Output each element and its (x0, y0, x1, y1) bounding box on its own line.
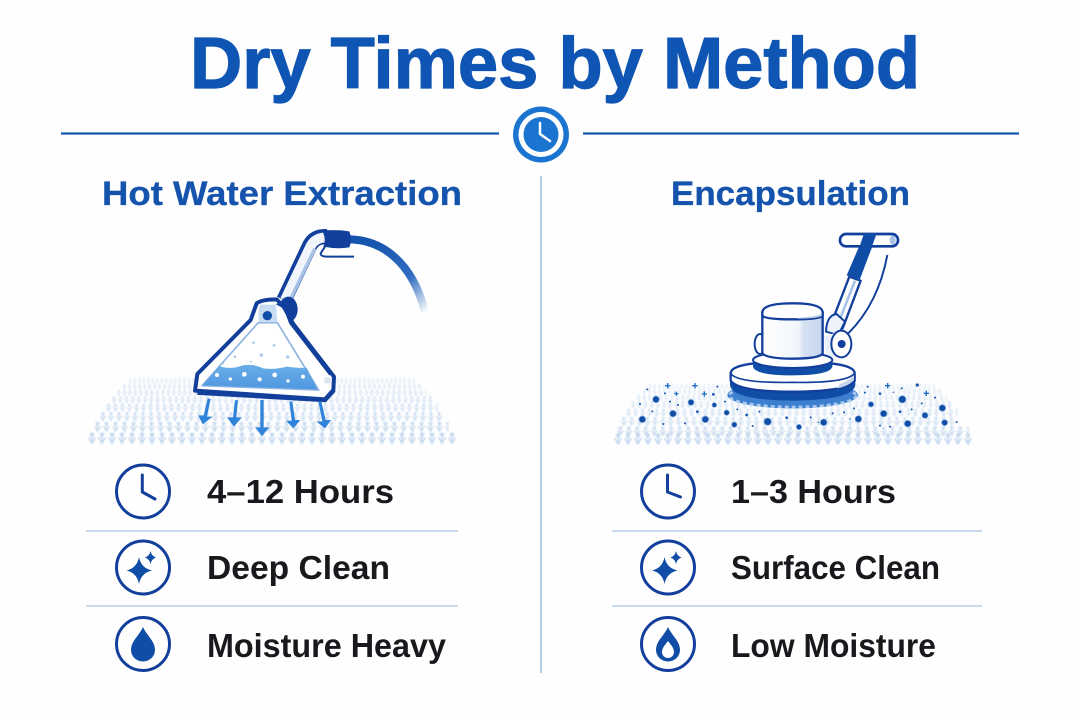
base collar (753, 361, 832, 375)
pivot (279, 297, 298, 322)
row: clean depth (116, 541, 390, 594)
icon: water drop (116, 618, 170, 670)
bubbles (215, 372, 305, 383)
deck (730, 377, 855, 401)
icon: sparkle (116, 541, 170, 594)
row: dry time (642, 465, 896, 518)
row: clean depth (642, 541, 940, 594)
brush (727, 382, 858, 408)
nozzle cap (259, 305, 277, 322)
heading: encapsulation: Encapsulation (671, 175, 910, 213)
text: moisture: Moisture Heavy (207, 627, 447, 664)
illustration: extraction wand (195, 230, 425, 436)
heading: hot water extraction: Hot Water Extraction (102, 175, 462, 213)
debris particles (639, 396, 948, 430)
hook (321, 247, 354, 257)
lower shaft (833, 277, 861, 328)
hose (348, 239, 425, 312)
panel: hot water extraction (86, 175, 462, 670)
spray arrows (198, 398, 331, 436)
panel: encapsulation (612, 175, 982, 670)
t-handle (840, 234, 898, 246)
text: clean depth: Deep Clean (207, 549, 390, 586)
nozzle glass (202, 323, 319, 390)
left knob (755, 334, 765, 354)
title: Dry Times by Method (190, 24, 920, 104)
text: dry time: 4–12 Hours (207, 473, 394, 510)
row: moisture (642, 618, 936, 670)
wand tube (284, 237, 327, 300)
icon: water drop outline (642, 618, 694, 670)
joint (826, 314, 845, 335)
sparkle particles (665, 383, 929, 397)
carpet: left (87, 378, 457, 444)
icon: clock (116, 465, 170, 518)
carpet: right (613, 384, 973, 445)
nozzle head (195, 299, 334, 399)
text: dry time: 1–3 Hours (731, 473, 896, 510)
upper shaft (847, 237, 876, 281)
text: clean depth: Surface Clean (731, 549, 940, 586)
row: dry time (116, 465, 394, 518)
text: moisture: Low Moisture (731, 627, 936, 664)
small particles (639, 383, 958, 428)
cord (848, 255, 887, 333)
motor (762, 313, 823, 359)
vent (324, 377, 331, 383)
illustration: floor machine (639, 233, 958, 430)
icon: clock (642, 465, 694, 518)
icon: header clock (513, 106, 569, 162)
row: moisture (116, 618, 447, 670)
water (203, 365, 317, 389)
icon: sparkle (642, 541, 694, 594)
collar (322, 230, 351, 248)
